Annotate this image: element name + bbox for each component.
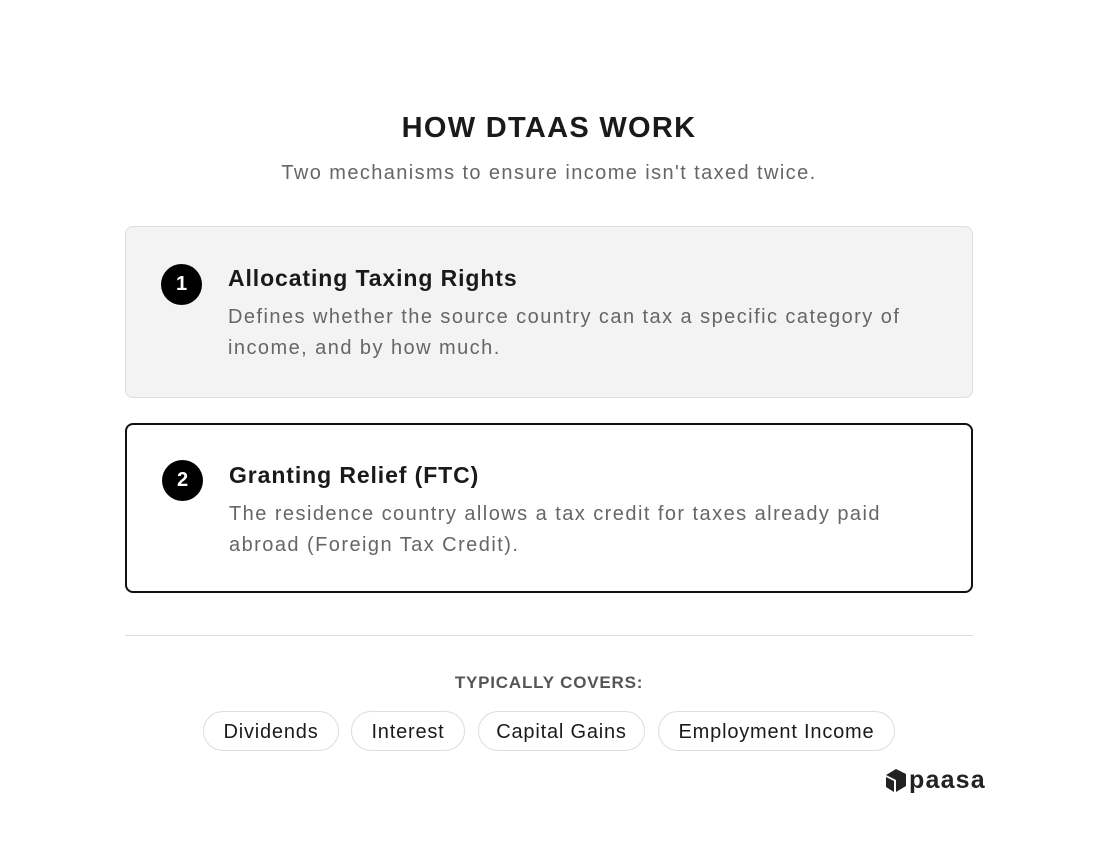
text: allocating description: Defines whether the source country can tax a specific category of income, and by how much. [228, 306, 900, 359]
pill: capital gains [478, 711, 645, 751]
pill: interest: Interest [371, 721, 445, 743]
heading: allocating taxing rights: Allocating Taxing Rights [228, 265, 518, 291]
pill: interest [351, 711, 465, 751]
text: relief description: The residence country allows a tax credit for taxes already paid abroad (Foreign Tax Credit). [229, 503, 881, 556]
icon: number 2: 2 [177, 469, 188, 491]
heading: granting relief: Granting Relief (FTC) [229, 462, 479, 488]
panel: allocating taxing rights [125, 226, 973, 398]
label: typically covers: TYPICALLY COVERS: [455, 673, 643, 692]
logo: paasa: paasa [909, 766, 986, 794]
icon: number 1: 1 [176, 273, 187, 295]
pill: employment income [658, 711, 895, 751]
title: HOW DTAAS WORK [402, 112, 696, 144]
subtitle: Two mechanisms to ensure income isn't taxed twice. [281, 162, 817, 184]
pill: dividends [203, 711, 339, 751]
icon: number 2 [162, 460, 203, 501]
pill: capital gains: Capital Gains [496, 721, 627, 743]
icon: number 1 [161, 264, 202, 305]
pill: dividends: Dividends [223, 721, 319, 743]
pill: employment income: Employment Income [679, 721, 874, 743]
panel: granting relief [125, 423, 973, 593]
